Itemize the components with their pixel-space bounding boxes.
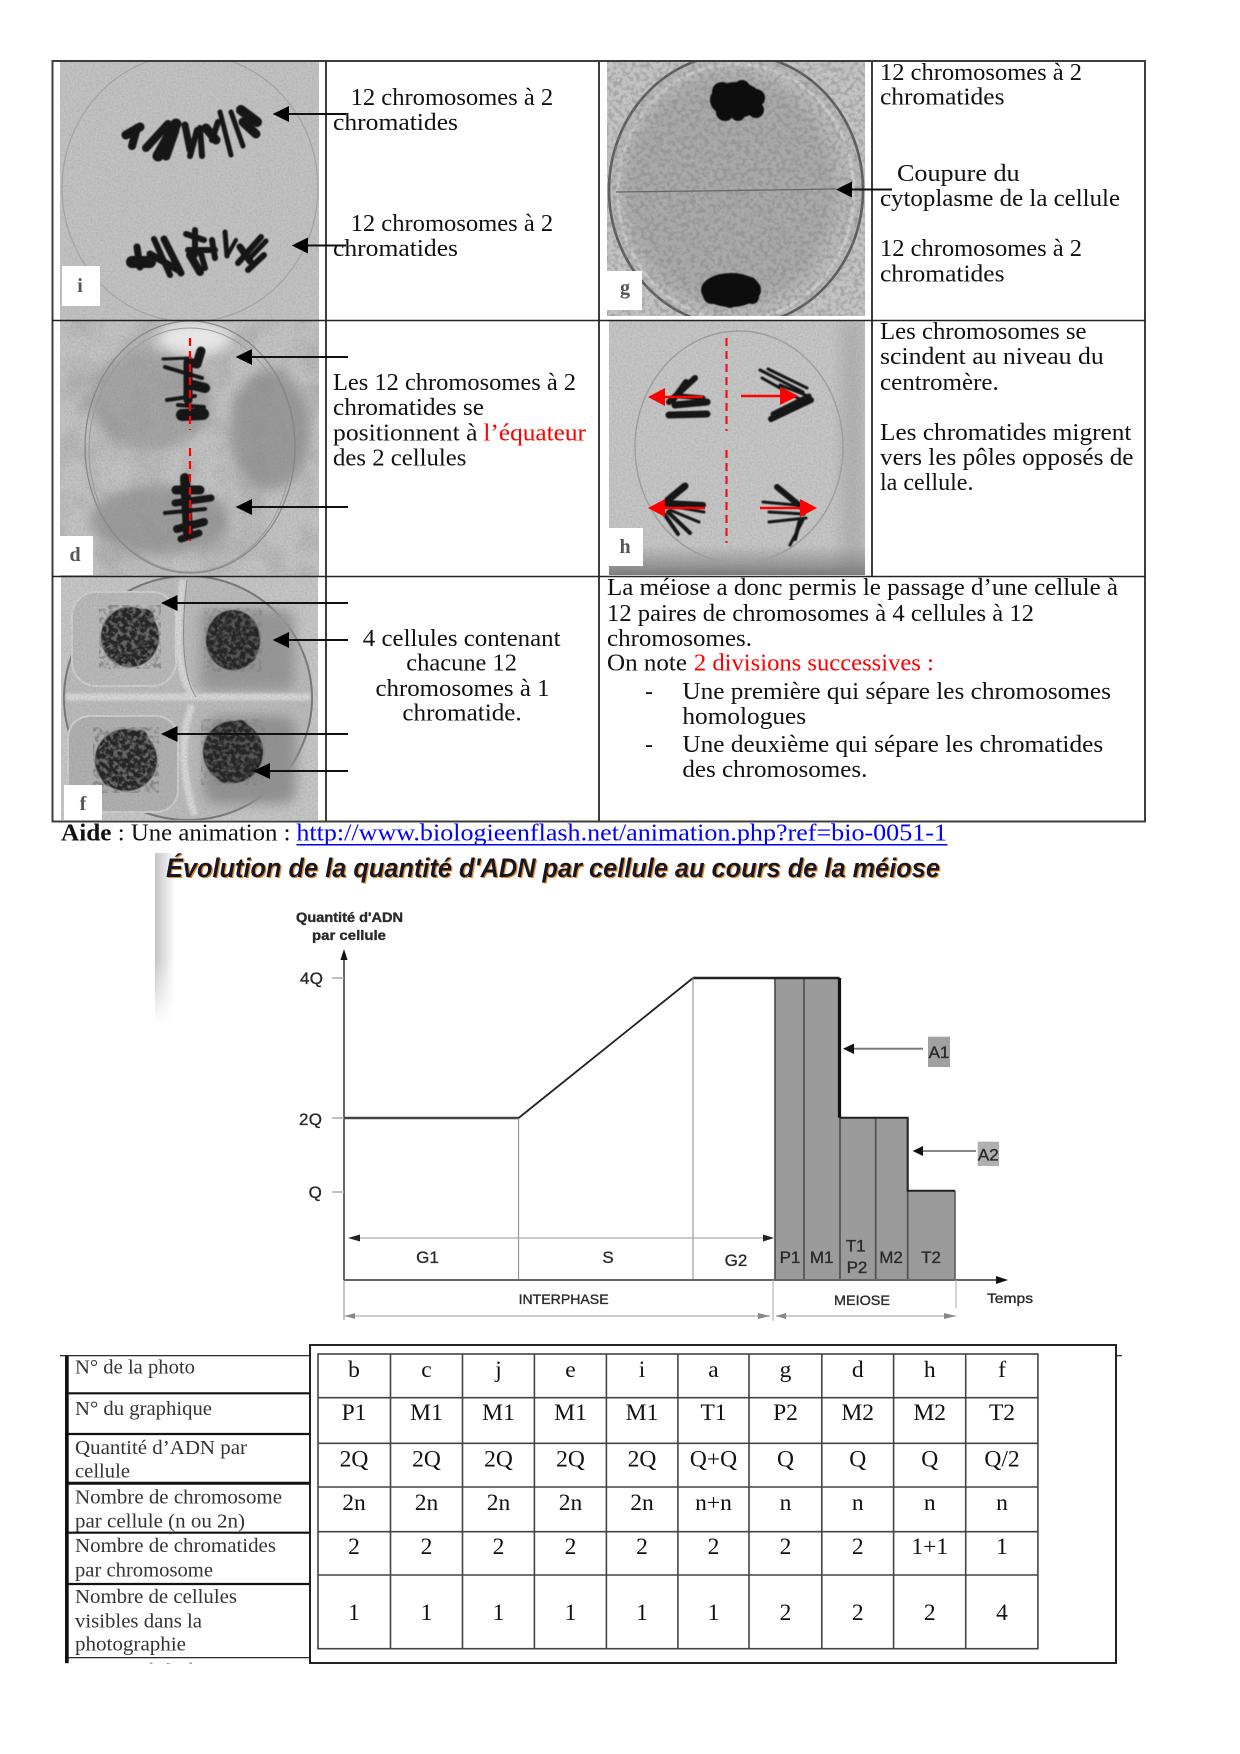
row labels of summary table xyxy=(60,1356,1122,1682)
text: photo g captions: 12 chromosomes à 2 xyxy=(880,60,1082,86)
text: photo h caption: Les chromatides migrent xyxy=(880,420,1132,446)
text: photo d caption: des 2 cellules xyxy=(333,446,466,472)
text: meiosis summary: chromosomes. xyxy=(607,626,752,652)
row: chromatids per chromosome: 2 xyxy=(636,1534,648,1560)
row: graph number: T2 xyxy=(989,1400,1015,1426)
row: chromosome number: 2n xyxy=(415,1490,438,1516)
row labels of summary table: par cellule (n ou 2n) xyxy=(75,1511,245,1533)
row: graph number: P2 xyxy=(773,1400,798,1426)
phase span arrow xyxy=(348,1234,774,1242)
help line with animation link: : Une animation : xyxy=(118,821,290,847)
row: chromatids per chromosome: 2 xyxy=(348,1534,360,1560)
row: chromosome number: n xyxy=(996,1490,1008,1516)
row: DNA quantity: 2Q xyxy=(484,1447,513,1473)
phase labels: G2 xyxy=(725,1251,747,1270)
row: photo number: g xyxy=(780,1357,792,1383)
row: chromatids per chromosome: 2 xyxy=(780,1534,791,1560)
row: chromosome number: n xyxy=(780,1490,792,1516)
text: photo d caption: l’équateur xyxy=(483,420,586,446)
text: photo f caption: 4 cellules contenant xyxy=(363,626,561,652)
text: photo d caption: chromatides se xyxy=(333,395,484,421)
red equator line: photo h xyxy=(725,338,728,543)
row: visible cells: 2 xyxy=(852,1600,864,1626)
x axis xyxy=(344,1276,1008,1284)
row: visible cells: 2 xyxy=(924,1600,936,1626)
text: photo i captions: 12 chromosomes à 2 xyxy=(351,85,553,111)
row: chromatids per chromosome: 2 xyxy=(421,1534,432,1560)
photo d: chromosomes at the equator xyxy=(60,321,319,576)
row: photo number: j xyxy=(494,1357,502,1383)
text: photo f caption xyxy=(363,626,561,727)
text: meiosis summary: Une deuxième qui sépare les chromatides xyxy=(682,732,1103,758)
photo g: cytoplasm cut: g xyxy=(620,277,630,299)
text: photo d caption xyxy=(333,370,586,472)
row: DNA quantity xyxy=(340,1447,1020,1473)
photo f: four cells xyxy=(61,576,318,820)
text: photo g captions: 12 chromosomes à 2 xyxy=(880,236,1082,262)
row: chromatids per chromosome: 1 xyxy=(996,1534,1008,1560)
row: chromosome number: n xyxy=(852,1490,864,1516)
text: meiosis summary: des chromosomes. xyxy=(682,757,867,783)
row: DNA quantity: 2Q xyxy=(412,1447,441,1473)
help line with animation link: http://www.biologieenflash.net/animation.php?ref=bio-0051-1 xyxy=(296,821,947,847)
row: graph number: T1 xyxy=(700,1400,727,1426)
chart title: Évolution de la quantité d'ADN par cellule au cours de la méiose xyxy=(166,852,940,883)
text: photo h caption: vers les pôles opposés de xyxy=(880,445,1134,471)
row: photo number: f xyxy=(998,1357,1006,1383)
summary table: answers grid xyxy=(310,1345,1116,1663)
panel: meiosis photo table xyxy=(52,54,1145,822)
text: meiosis summary xyxy=(607,575,1118,783)
text: photo d caption: Les 12 chromosomes à 2 xyxy=(333,370,576,396)
callout A1: A1 xyxy=(929,1043,949,1062)
text: photo d caption: positionnent à xyxy=(333,420,478,446)
meiosis grey bars xyxy=(775,978,955,1280)
callout A2: A2 xyxy=(978,1146,999,1165)
arrows: photo d xyxy=(236,349,348,515)
row labels of summary table: Nombre de cellules xyxy=(75,1586,237,1608)
y axis xyxy=(332,949,348,1320)
photo h: chromatids migrating xyxy=(609,321,865,575)
photo i: two groups of chromosomes: i xyxy=(77,275,83,297)
row labels of summary table: Fonction de la division xyxy=(75,1660,243,1682)
row: graph number: M2 xyxy=(841,1400,874,1426)
text: photo h caption: la cellule. xyxy=(880,470,974,496)
phase labels: T1 xyxy=(846,1237,866,1256)
row: chromosome number: n+n xyxy=(695,1490,732,1516)
row: chromosome number: n xyxy=(924,1490,936,1516)
interphase and meiosis spans: MEIOSE xyxy=(834,1292,890,1308)
text: meiosis summary: homologues xyxy=(682,704,806,730)
callout A2 xyxy=(913,1142,999,1166)
text: photo f caption: chromatide. xyxy=(402,701,522,727)
row: DNA quantity: 2Q xyxy=(340,1447,368,1473)
row: chromosome number xyxy=(342,1490,1008,1516)
row labels of summary table: Nombre de chromosome xyxy=(75,1486,282,1508)
photo d: chromosomes at the equator: d xyxy=(69,544,81,566)
y axis title xyxy=(296,910,403,943)
y axis tick labels xyxy=(299,969,323,1202)
row: visible cells xyxy=(348,1600,1008,1626)
row: graph number: M1 xyxy=(482,1400,515,1426)
row: chromatids per chromosome: 1+1 xyxy=(911,1534,948,1560)
row: photo number: b xyxy=(348,1357,360,1383)
phase labels: P1 xyxy=(780,1248,800,1267)
row labels of summary table: N° du graphique xyxy=(75,1398,212,1420)
text: photo h caption: scindent au niveau du xyxy=(880,344,1104,370)
red arrows: photo h xyxy=(648,387,817,517)
phase labels: S xyxy=(602,1248,614,1267)
text: photo g captions: Coupure du xyxy=(897,161,1020,187)
phase labels: M1 xyxy=(810,1248,834,1267)
text: meiosis summary: Une première qui sépare les chromosomes xyxy=(682,679,1111,705)
phase labels: P2 xyxy=(847,1258,867,1277)
row: DNA quantity: 2Q xyxy=(556,1447,585,1473)
line chart: DNA quantity per cell during meiosis xyxy=(296,910,1033,1321)
text: photo g captions: cytoplasme de la cellule xyxy=(880,186,1120,212)
y axis tick labels: 4Q xyxy=(300,969,323,988)
row: visible cells: 1 xyxy=(421,1600,432,1626)
row: graph number: M1 xyxy=(554,1400,587,1426)
row: DNA quantity: Q xyxy=(921,1447,938,1473)
row labels of summary table: Nombre de chromatides xyxy=(75,1535,276,1557)
phase labels: M2 xyxy=(879,1248,903,1267)
photo i: two groups of chromosomes xyxy=(60,54,319,322)
row: DNA quantity: Q/2 xyxy=(984,1447,1020,1473)
row: chromatids per chromosome: 2 xyxy=(493,1534,504,1560)
row: photo number xyxy=(348,1357,1006,1383)
text: meiosis summary: La méiose a donc permis le passage d’une cellule à xyxy=(607,575,1118,601)
text: meiosis summary: On note xyxy=(607,651,687,677)
arrows: photo f xyxy=(161,595,348,779)
text: meiosis summary: - xyxy=(645,732,653,758)
text: photo i captions xyxy=(333,85,553,262)
row: graph number: M2 xyxy=(913,1400,946,1426)
interphase and meiosis spans: INTERPHASE xyxy=(519,1291,609,1307)
text: photo f caption: chacune 12 xyxy=(406,651,517,677)
text: photo h caption: centromère. xyxy=(880,370,999,396)
y axis tick labels: Q xyxy=(309,1183,322,1202)
row: chromatids per chromosome: 2 xyxy=(708,1534,719,1560)
interphase and meiosis spans: Temps xyxy=(987,1290,1033,1306)
help line with animation link: Aide xyxy=(61,821,112,847)
row: chromosome number: 2n xyxy=(559,1490,582,1516)
y axis tick labels: 2Q xyxy=(299,1110,322,1129)
text: meiosis summary: - xyxy=(645,679,653,705)
callout A1 xyxy=(843,1037,950,1067)
table grid xyxy=(52,61,1145,822)
row: graph number xyxy=(342,1400,1015,1426)
row: visible cells: 1 xyxy=(708,1600,719,1626)
text: photo i captions: chromatides xyxy=(333,236,458,262)
photo g: cytoplasm cut xyxy=(607,54,865,326)
row: photo number: a xyxy=(708,1357,719,1383)
photo f: four cells: f xyxy=(80,793,87,815)
row: DNA quantity: Q+Q xyxy=(690,1447,737,1473)
row labels of summary table: cellule xyxy=(75,1461,130,1483)
row: chromatids per chromosome xyxy=(348,1534,1008,1560)
row labels of summary table: Quantité d’ADN par xyxy=(75,1437,247,1459)
row: chromosome number: 2n xyxy=(342,1490,366,1516)
photo h: chromatids migrating: h xyxy=(619,536,631,558)
row: photo number: c xyxy=(421,1357,432,1383)
row labels of summary table: photographie xyxy=(75,1634,186,1656)
phase labels xyxy=(416,1237,941,1277)
text: photo g captions xyxy=(880,60,1120,288)
row: photo number: i xyxy=(639,1357,646,1383)
phase labels: T2 xyxy=(921,1248,941,1267)
row: visible cells: 1 xyxy=(636,1600,648,1626)
text: meiosis summary: 2 divisions successives : xyxy=(694,651,934,677)
row: visible cells: 1 xyxy=(348,1600,360,1626)
row labels of summary table: par chromosome xyxy=(75,1560,213,1582)
row: chromatids per chromosome: 2 xyxy=(565,1534,576,1560)
red equator line: photo d xyxy=(189,338,191,541)
DNA curve xyxy=(344,978,955,1191)
left shaded edge of chart image xyxy=(155,853,175,1025)
text: meiosis summary: 12 paires de chromosomes à 4 cellules à 12 xyxy=(607,601,1034,627)
phase separators xyxy=(519,978,693,1280)
y axis title: Quantité d'ADN xyxy=(296,910,403,925)
row: chromosome number: 2n xyxy=(630,1490,654,1516)
arrows: photo i xyxy=(273,106,346,254)
text: photo g captions: chromatides xyxy=(880,262,1004,288)
row: graph number: P1 xyxy=(342,1400,366,1426)
row: DNA quantity: Q xyxy=(849,1447,866,1473)
text: photo i captions: chromatides xyxy=(333,110,458,136)
text: photo i captions: 12 chromosomes à 2 xyxy=(351,211,553,237)
row: visible cells: 1 xyxy=(493,1600,504,1626)
help line with animation link xyxy=(61,821,947,847)
row: DNA quantity: 2Q xyxy=(628,1447,656,1473)
row: visible cells: 4 xyxy=(996,1600,1008,1626)
row: DNA quantity: Q xyxy=(777,1447,794,1473)
text: photo g captions: chromatides xyxy=(880,85,1004,111)
row: visible cells: 2 xyxy=(780,1600,791,1626)
text: photo h caption: Les chromosomes se xyxy=(880,319,1086,345)
row: chromatids per chromosome: 2 xyxy=(852,1534,864,1560)
row: photo number: d xyxy=(852,1357,864,1383)
row labels of summary table: visibles dans la xyxy=(75,1610,202,1632)
row: photo number: h xyxy=(924,1357,936,1383)
phase labels: G1 xyxy=(416,1248,439,1267)
arrow: photo g xyxy=(836,182,892,198)
row: chromosome number: 2n xyxy=(487,1490,510,1516)
row: photo number: e xyxy=(565,1357,576,1383)
row: graph number: M1 xyxy=(626,1400,658,1426)
interphase and meiosis spans xyxy=(344,1280,1033,1321)
row: graph number: M1 xyxy=(410,1400,443,1426)
text: photo h caption xyxy=(880,319,1134,496)
row labels of summary table: N° de la photo xyxy=(75,1356,195,1378)
row: visible cells: 1 xyxy=(565,1600,576,1626)
text: photo f caption: chromosomes à 1 xyxy=(376,676,550,702)
y axis title: par cellule xyxy=(312,928,387,943)
